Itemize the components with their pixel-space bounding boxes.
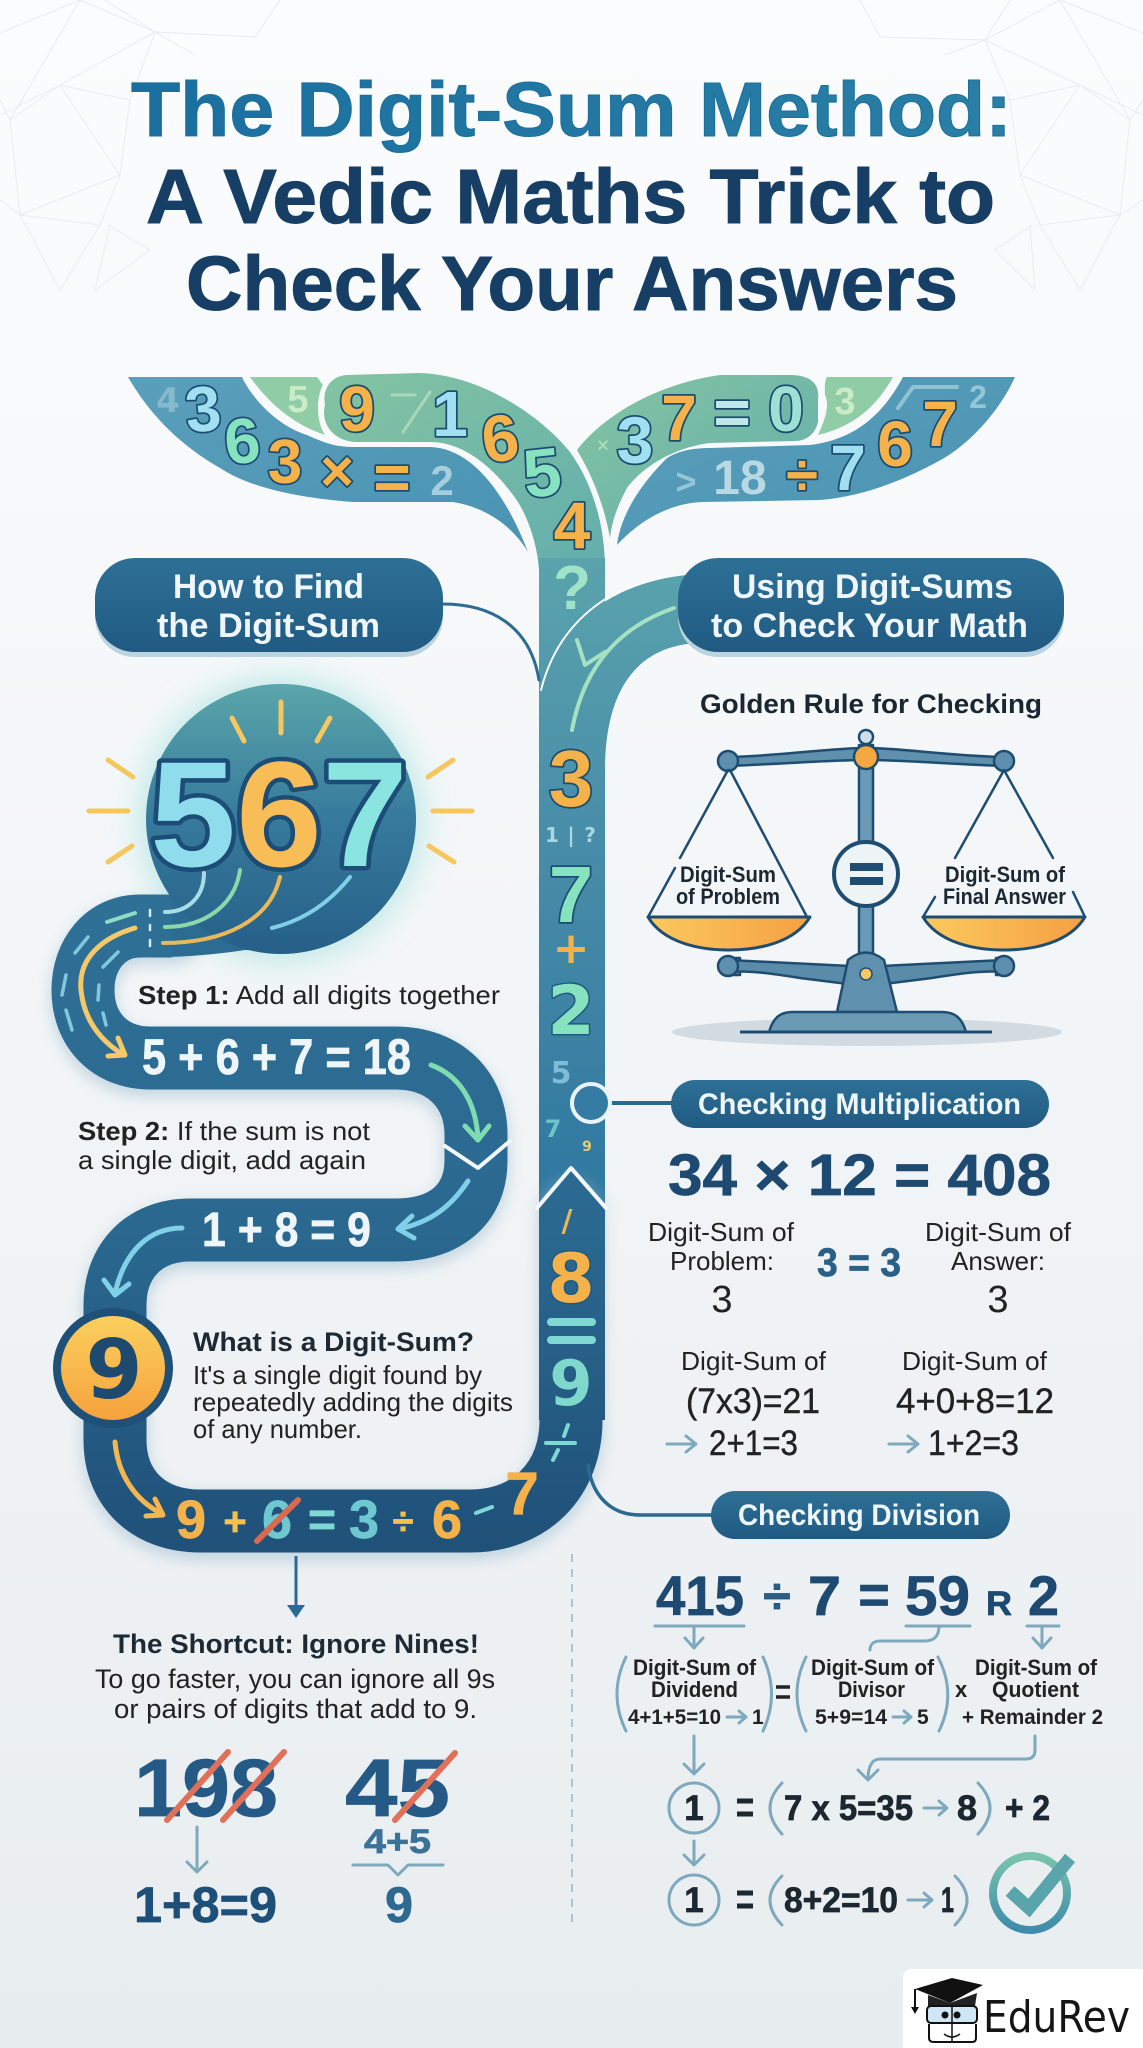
leaf digits: 0: [768, 373, 804, 445]
circle with 567: 567: [150, 730, 408, 898]
quotient block: + Remainder 2: [962, 1706, 1103, 1729]
leaf digits: [156, 372, 987, 623]
yellow arrow to bottom row: [115, 1442, 163, 1516]
division arrows: [655, 1626, 1059, 1650]
bottom row equation: [176, 1460, 539, 1550]
example 198: 198: [134, 1743, 278, 1834]
scale post and base: [718, 745, 1014, 1032]
shortcut text: or pairs of digits that add to 9.: [114, 1694, 477, 1724]
three equals three: 3 = 3: [817, 1241, 901, 1285]
leaf digits: 5: [519, 433, 565, 513]
flow arrows: [684, 1736, 1035, 1865]
example 45: 4+5: [364, 1823, 431, 1861]
working: answer: [889, 1346, 1054, 1463]
faint slash: [392, 392, 430, 432]
title: A Vedic Maths Trick to: [146, 154, 995, 240]
leaf digits: 7: [922, 388, 958, 460]
quotient block: Quotient: [992, 1677, 1080, 1702]
multiplication problem digit-sum: [648, 1217, 795, 1321]
plant stem: [539, 558, 605, 1210]
bottom row equation: 6: [262, 1490, 292, 1550]
quotient block: Digit-Sum of: [975, 1655, 1098, 1680]
leaf digits: 5: [287, 379, 309, 421]
pan labels: Final Answer: [943, 884, 1066, 909]
leaf digits: 1: [432, 378, 468, 450]
leaf digits: 7: [830, 432, 866, 504]
equals sign: [776, 1687, 790, 1697]
bottom row equation: 6: [432, 1490, 462, 1550]
connector to checking division: [588, 1465, 712, 1515]
leaf digits: 2: [969, 379, 987, 415]
leaf digits: =: [373, 441, 411, 513]
leaf digits: 6: [221, 403, 264, 479]
bottom row equation: 9: [176, 1490, 206, 1550]
blue arrows: [104, 1181, 468, 1295]
working: answer: Digit-Sum of: [902, 1346, 1048, 1376]
circle with 567: [146, 684, 416, 954]
icon: check mark: [993, 1856, 1070, 1930]
connector to shortcut: [287, 1556, 305, 1618]
sum equation: 5 + 6 + 7 = 18: [142, 1029, 411, 1085]
leaf digits: 3: [617, 403, 653, 477]
pill: checking division: [711, 1491, 1010, 1539]
logo: EduRev: [903, 1969, 1143, 2048]
pill: checking division: Checking Division: [738, 1499, 980, 1532]
leaf digits: ×: [597, 435, 609, 457]
division equation: 415: [656, 1564, 744, 1627]
stem digits: 2: [547, 972, 595, 1051]
quotient block: [955, 1655, 1103, 1729]
step 2 text: [78, 1116, 371, 1175]
pill: how to find: How to Find: [173, 568, 364, 606]
pill: how to find: [95, 558, 443, 657]
division equation: =: [858, 1565, 890, 1625]
stem digits: +: [553, 923, 589, 974]
scale beam: [718, 730, 1014, 771]
scale strings: [648, 770, 1085, 917]
leaf digits: 9: [339, 373, 375, 445]
result row 1: 7 x 5=35: [784, 1789, 913, 1828]
division equation: R: [986, 1585, 1012, 1623]
dividend block: [628, 1655, 764, 1729]
stem digits: [545, 734, 596, 1460]
stem digits: 7: [545, 1115, 561, 1143]
leaf digits: 3: [834, 381, 856, 423]
branch to right pill: [539, 574, 700, 770]
scale pans: [648, 917, 1085, 950]
division equation: 7: [808, 1564, 841, 1627]
result row 2: 1: [941, 1881, 954, 1920]
division equation: ÷: [763, 1568, 791, 1624]
branch arrow: [572, 608, 674, 730]
bottom row equation: +: [223, 1500, 247, 1544]
serpentine path shadow: [83, 932, 571, 1527]
what is a digit-sum: of any number.: [193, 1414, 362, 1444]
multiplication answer digit-sum: 3: [987, 1279, 1009, 1321]
shortcut text: The Shortcut: Ignore Nines!: [113, 1629, 479, 1659]
connector: left pill to stem: [443, 604, 539, 680]
bottom row equation: 3: [349, 1490, 379, 1550]
result row 1: + 2: [1005, 1789, 1050, 1828]
connector ring: [572, 1084, 675, 1122]
example 45: [345, 1743, 455, 1933]
quotient block: x: [955, 1677, 968, 1702]
leaf digits: 4: [554, 488, 591, 562]
division equation: [656, 1564, 1059, 1627]
result row 1: 8: [957, 1789, 977, 1828]
multiplication problem digit-sum: Digit-Sum of: [648, 1217, 795, 1247]
multiplication answer digit-sum: Answer:: [951, 1246, 1045, 1276]
stem digits: ?: [584, 823, 596, 847]
division brackets: [617, 1657, 948, 1731]
shortcut text: To go faster, you can ignore all 9s: [95, 1664, 495, 1694]
stem digits: 1: [545, 823, 559, 847]
example 198: [134, 1743, 284, 1933]
dividend block: Dividend: [651, 1677, 738, 1702]
green arrow: [431, 1065, 489, 1140]
leaf digits: ×: [320, 439, 354, 504]
stem digits: /: [562, 1204, 573, 1239]
bottom row equation: ÷: [393, 1501, 413, 1543]
pill: checking multiplication: [671, 1080, 1049, 1128]
left leaves: [128, 373, 605, 570]
what is a digit-sum: It's a single digit found by: [193, 1360, 482, 1390]
stem digits: 7: [549, 850, 593, 939]
gold 9 badge: 9: [85, 1323, 143, 1418]
stem digits: 9: [549, 1347, 593, 1420]
divisor block: Digit-Sum of: [811, 1655, 935, 1680]
divisor block: Divisor: [838, 1677, 905, 1702]
icon: graduation cap: [911, 1978, 983, 2042]
result row 2: [669, 1875, 967, 1925]
pan labels: Digit-Sum of: [945, 862, 1066, 887]
stem digits: |: [567, 823, 575, 847]
dividend block: 1: [752, 1706, 764, 1729]
leaf digits: 2: [430, 457, 454, 504]
stem digits: 8: [547, 1240, 595, 1319]
divider: [571, 1554, 573, 1926]
equals circle: [834, 842, 898, 906]
flow lines from 567: [107, 870, 350, 943]
balance scale: [648, 730, 1085, 1046]
pill: using digit sums: [678, 558, 1064, 657]
divisor block: [811, 1655, 935, 1729]
pill: using digit sums: Using Digit-Sums: [732, 568, 1013, 606]
stem digits: 5: [551, 1056, 571, 1091]
dividend block: 4+1+5=10: [628, 1706, 721, 1729]
divisor block: 5: [917, 1706, 929, 1729]
pill: checking multiplication: Checking Multiplication: [698, 1088, 1021, 1121]
right leaves: [577, 375, 1015, 545]
what is a digit-sum: [193, 1327, 513, 1444]
multiplication problem digit-sum: Problem:: [670, 1246, 774, 1276]
leaf digits: 18: [713, 452, 767, 505]
sun rays: [89, 702, 472, 862]
pan labels: Digit-Sum: [680, 862, 776, 887]
division equation: 59: [905, 1564, 970, 1627]
second sum: 1 + 8 = 9: [202, 1204, 371, 1257]
multiplication answer digit-sum: Digit-Sum of: [925, 1217, 1072, 1247]
title: [131, 67, 1012, 327]
gold 9 badge: [53, 1308, 173, 1428]
result row 1: [669, 1783, 1050, 1834]
example 45: 9: [385, 1877, 413, 1933]
pan labels: [676, 862, 1066, 909]
working: answer: 1+2=3: [928, 1424, 1019, 1463]
example 198: 1+8=9: [134, 1877, 277, 1933]
pan labels: of Problem: [676, 884, 780, 909]
result row 1: 1: [684, 1789, 704, 1828]
leaf digits: 3: [268, 428, 302, 497]
leaf digits: ÷: [786, 443, 818, 508]
stem digits: 3: [549, 734, 593, 823]
leaf digits: 7: [661, 382, 697, 454]
leaf digits: 6: [877, 408, 913, 480]
step 2 text: a single digit, add again: [78, 1145, 366, 1175]
result row 2: 8+2=10: [784, 1881, 898, 1920]
divisor block: 5+9=14: [815, 1706, 887, 1729]
leaf digits: 6: [477, 399, 523, 477]
dashes on path: [62, 910, 150, 1030]
leaf digits: 3: [182, 372, 224, 446]
working: problem: [667, 1346, 827, 1463]
dividend block: Digit-Sum of: [633, 1655, 757, 1680]
working: problem: (7x3)=21: [686, 1382, 820, 1421]
serpentine path: [83, 895, 606, 1521]
working: answer: 4+0+8=12: [896, 1382, 1054, 1421]
leaf digits: ?: [553, 554, 591, 623]
glow behind 567: [143, 681, 419, 957]
pill: how to find: the Digit-Sum: [157, 607, 380, 645]
shortcut text: [95, 1629, 495, 1724]
working: problem: 2+1=3: [709, 1424, 798, 1463]
what is a digit-sum: What is a Digit-Sum?: [193, 1327, 474, 1357]
leaf digits: 4: [156, 381, 180, 421]
leaf digits: =: [713, 376, 751, 448]
result row 2: 1: [684, 1881, 704, 1920]
pill: using digit sums: to Check Your Math: [711, 607, 1028, 645]
scale shadow: [672, 1018, 1062, 1046]
bottom row equation: =: [308, 1494, 336, 1547]
multiplication problem digit-sum: 3: [711, 1279, 733, 1321]
bottom row equation: 7: [505, 1460, 539, 1527]
golden rule heading: Golden Rule for Checking: [700, 689, 1042, 719]
multiplication answer digit-sum: [925, 1217, 1072, 1321]
step 2 text: Step 2: If the sum is not: [78, 1116, 371, 1146]
title: Check Your Answers: [186, 241, 958, 327]
step 1 text: Step 1: Add all digits together: [138, 980, 500, 1010]
what is a digit-sum: repeatedly adding the digits: [193, 1387, 513, 1417]
yellow arrow: [81, 928, 135, 1056]
multiplication equation: 34 × 12 = 408: [668, 1143, 1051, 1208]
stem digits: 9: [582, 1139, 592, 1155]
example 45: 45: [345, 1743, 450, 1834]
leaf digits: >: [675, 461, 697, 502]
working: problem: Digit-Sum of: [681, 1346, 827, 1376]
title: The Digit-Sum Method:: [131, 67, 1012, 153]
division equation: 2: [1028, 1564, 1059, 1627]
